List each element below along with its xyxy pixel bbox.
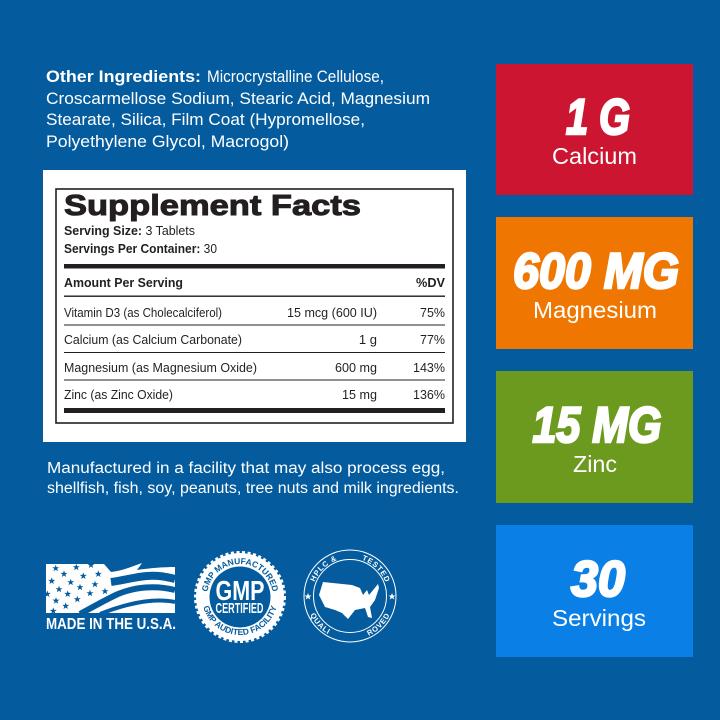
serving info: Serving Size: 3 Tablets (64, 223, 195, 238)
icon: made in the usa flag (44, 561, 176, 633)
panel: calcium: Calcium (552, 143, 637, 169)
text block: allergen note: Manufactured in a facility that may also process egg, (47, 460, 445, 477)
panel: calcium: 1 G (566, 89, 630, 145)
text block: other ingredients: Croscarmellose Sodium, Stearic Acid, Magnesium (46, 89, 430, 108)
panel: magnesium: 600 MG (513, 243, 679, 299)
table rows: 136% (413, 387, 445, 402)
panel: servings: 30 (571, 551, 625, 607)
text block: allergen note (47, 460, 459, 497)
icon: hplc tested quality approved seal (304, 550, 396, 642)
serving info: Servings Per Container: 30 (64, 241, 217, 256)
icon: gmp certified badge: GMP MANUFACTURED (202, 558, 278, 592)
table rows: Vitamin D3 (as Cholecalciferol) (64, 305, 222, 320)
panel: supplement facts (43, 170, 466, 442)
table rows: 15 mcg (600 IU) (287, 305, 377, 320)
icon: gmp certified badge: GMP AUDITED FACILITY (204, 605, 276, 635)
table rows: 75% (420, 305, 445, 320)
table rows: Magnesium (as Magnesium Oxide) (64, 360, 257, 375)
text block: other ingredients: Stearate, Silica, Film Coat (Hypromellose, (46, 110, 365, 129)
panel: zinc: Zinc (573, 451, 617, 477)
text block: other ingredients: Microcrystalline Cellulose, (207, 67, 384, 86)
panel: calcium (496, 64, 693, 195)
panel: servings: Servings (552, 605, 646, 631)
icon: gmp certified badge: GMP (216, 575, 264, 606)
icon: gmp certified badge (194, 551, 286, 643)
table rows: 77% (420, 332, 445, 347)
table header: %DV (416, 275, 445, 290)
stars (44, 561, 108, 614)
text block: other ingredients: Other Ingredients: (46, 68, 201, 86)
panel: servings (496, 525, 693, 657)
heading: supplement facts: Supplement Facts (64, 190, 361, 222)
table header: Amount Per Serving (64, 275, 183, 290)
icon: hplc tested quality approved seal: ROVED (366, 614, 389, 636)
icon: gmp certified badge: CERTIFIED (216, 600, 264, 617)
text block: allergen note: shellfish, fish, soy, peanuts, tree nuts and milk ingredients. (47, 480, 459, 497)
table rows (64, 305, 445, 402)
serving info (64, 223, 217, 256)
text block: other ingredients (46, 67, 430, 151)
table rows: 1 g (359, 332, 377, 347)
table rows: 600 mg (335, 360, 377, 375)
panel: magnesium: Magnesium (533, 297, 657, 323)
panel: zinc: 15 MG (532, 397, 662, 453)
table rows: 15 mg (342, 387, 377, 402)
icon: made in the usa flag: MADE IN THE U.S.A. (46, 616, 176, 633)
panel: magnesium (496, 217, 693, 349)
panel: zinc (496, 371, 693, 503)
table rows: Zinc (as Zinc Oxide) (64, 387, 173, 402)
table rows: Calcium (as Calcium Carbonate) (64, 332, 242, 347)
text block: other ingredients: Polyethylene Glycol, Macrogol) (46, 132, 289, 151)
table header (64, 275, 445, 290)
icon: hplc tested quality approved seal: HPLC & (310, 556, 337, 582)
icon: hplc tested quality approved seal: TESTED (363, 555, 390, 582)
icon: hplc tested quality approved seal: QUALI (310, 613, 330, 634)
table rows: 143% (413, 360, 445, 375)
